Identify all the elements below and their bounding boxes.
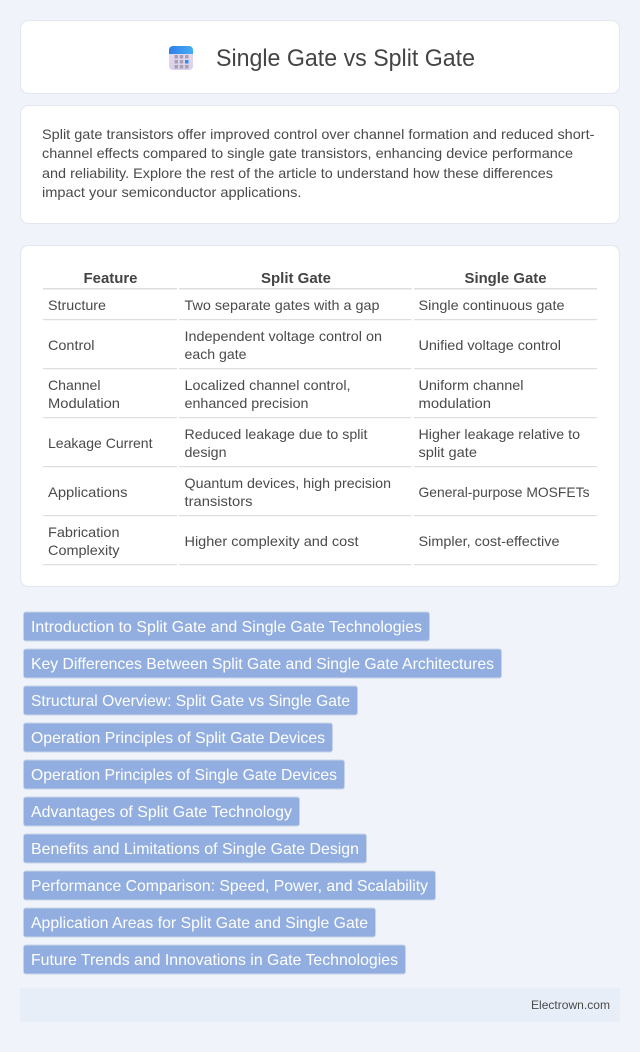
table header: Split Gate	[261, 270, 331, 287]
row: fabrication complexity: Higher complexity and cost	[184, 533, 359, 549]
row: leakage current: Leakage Current	[48, 435, 153, 451]
link: advantages	[24, 797, 300, 826]
row: control: each gate	[184, 346, 247, 362]
table of contents links	[24, 612, 502, 974]
intro text	[42, 126, 595, 200]
row: fabrication complexity: Complexity	[48, 542, 120, 558]
table header: Feature	[84, 270, 138, 287]
row: applications: General-purpose MOSFETs	[418, 484, 590, 500]
panel: comparison table	[20, 246, 620, 586]
intro text: impact your semiconductor applications.	[42, 184, 302, 200]
title: Single Gate vs Split Gate	[216, 45, 475, 72]
intro text: channel effects compared to single gate transistors, enhancing device performance	[42, 145, 573, 161]
row: control: Control	[48, 337, 94, 353]
link: operation single: Operation Principles of Single Gate Devices	[31, 767, 337, 784]
row: fabrication complexity: Simpler, cost-effective	[418, 533, 560, 549]
row: fabrication complexity	[48, 524, 560, 558]
link: structural overview	[24, 686, 358, 715]
row: structure: Two separate gates with a gap	[184, 297, 380, 313]
intro text: and reliability. Explore the rest of the article to understand how these differences	[42, 165, 553, 181]
row: applications: Applications	[48, 484, 128, 500]
link: performance: Performance Comparison: Speed, Power, and Scalability	[31, 878, 428, 895]
row: fabrication complexity: Fabrication	[48, 524, 120, 540]
row: structure	[48, 297, 565, 313]
row: control	[48, 328, 561, 362]
footer	[20, 988, 620, 1022]
header card	[20, 20, 620, 94]
link: operation single	[24, 760, 344, 789]
link: key differences: Key Differences Between Split Gate and Single Gate Architectures	[31, 656, 494, 673]
row: leakage current: split gate	[418, 444, 477, 460]
footer: Electrown.com	[531, 998, 610, 1012]
row: control: Unified voltage control	[418, 337, 561, 353]
intro text: Split gate transistors offer improved control over channel formation and reduced short-	[42, 126, 595, 142]
link: future trends	[24, 945, 406, 974]
link: application areas	[24, 908, 376, 937]
icon: calendar grid	[169, 46, 193, 70]
row: channel modulation: Localized channel control,	[184, 377, 350, 393]
intro panel	[20, 106, 620, 224]
link: operation split	[24, 723, 332, 752]
row: channel modulation: Channel	[48, 377, 100, 393]
row: applications: Quantum devices, high precision	[184, 475, 391, 491]
link: benefits	[24, 834, 366, 863]
link: advantages: Advantages of Split Gate Technology	[31, 804, 292, 821]
link: operation split: Operation Principles of Split Gate Devices	[31, 730, 325, 747]
row: leakage current: Reduced leakage due to split	[184, 426, 368, 442]
row: channel modulation: modulation	[418, 395, 491, 411]
row: applications	[48, 475, 590, 509]
row: leakage current	[48, 426, 580, 460]
row: channel modulation: Uniform channel	[418, 377, 524, 393]
link: structural overview: Structural Overview: Split Gate vs Single Gate	[31, 693, 350, 710]
link: performance	[24, 871, 436, 900]
row: leakage current: design	[184, 444, 226, 460]
row: structure: Structure	[48, 297, 106, 313]
link: application areas: Application Areas for Split Gate and Single Gate	[31, 915, 368, 932]
row: channel modulation: enhanced precision	[184, 395, 308, 411]
row: structure: Single continuous gate	[418, 297, 565, 313]
row: leakage current: Higher leakage relative to	[418, 426, 580, 442]
link: introduction: Introduction to Split Gate and Single Gate Technologies	[31, 619, 422, 636]
link: future trends: Future Trends and Innovations in Gate Technologies	[31, 952, 398, 969]
row: channel modulation	[48, 377, 524, 411]
row: channel modulation: Modulation	[48, 395, 120, 411]
link: benefits: Benefits and Limitations of Single Gate Design	[31, 841, 359, 858]
table header: Single Gate	[464, 270, 546, 287]
link: introduction	[24, 612, 430, 641]
link: key differences	[24, 649, 502, 678]
row: control: Independent voltage control on	[184, 328, 382, 344]
row: applications: transistors	[184, 493, 252, 509]
table header	[84, 270, 546, 287]
